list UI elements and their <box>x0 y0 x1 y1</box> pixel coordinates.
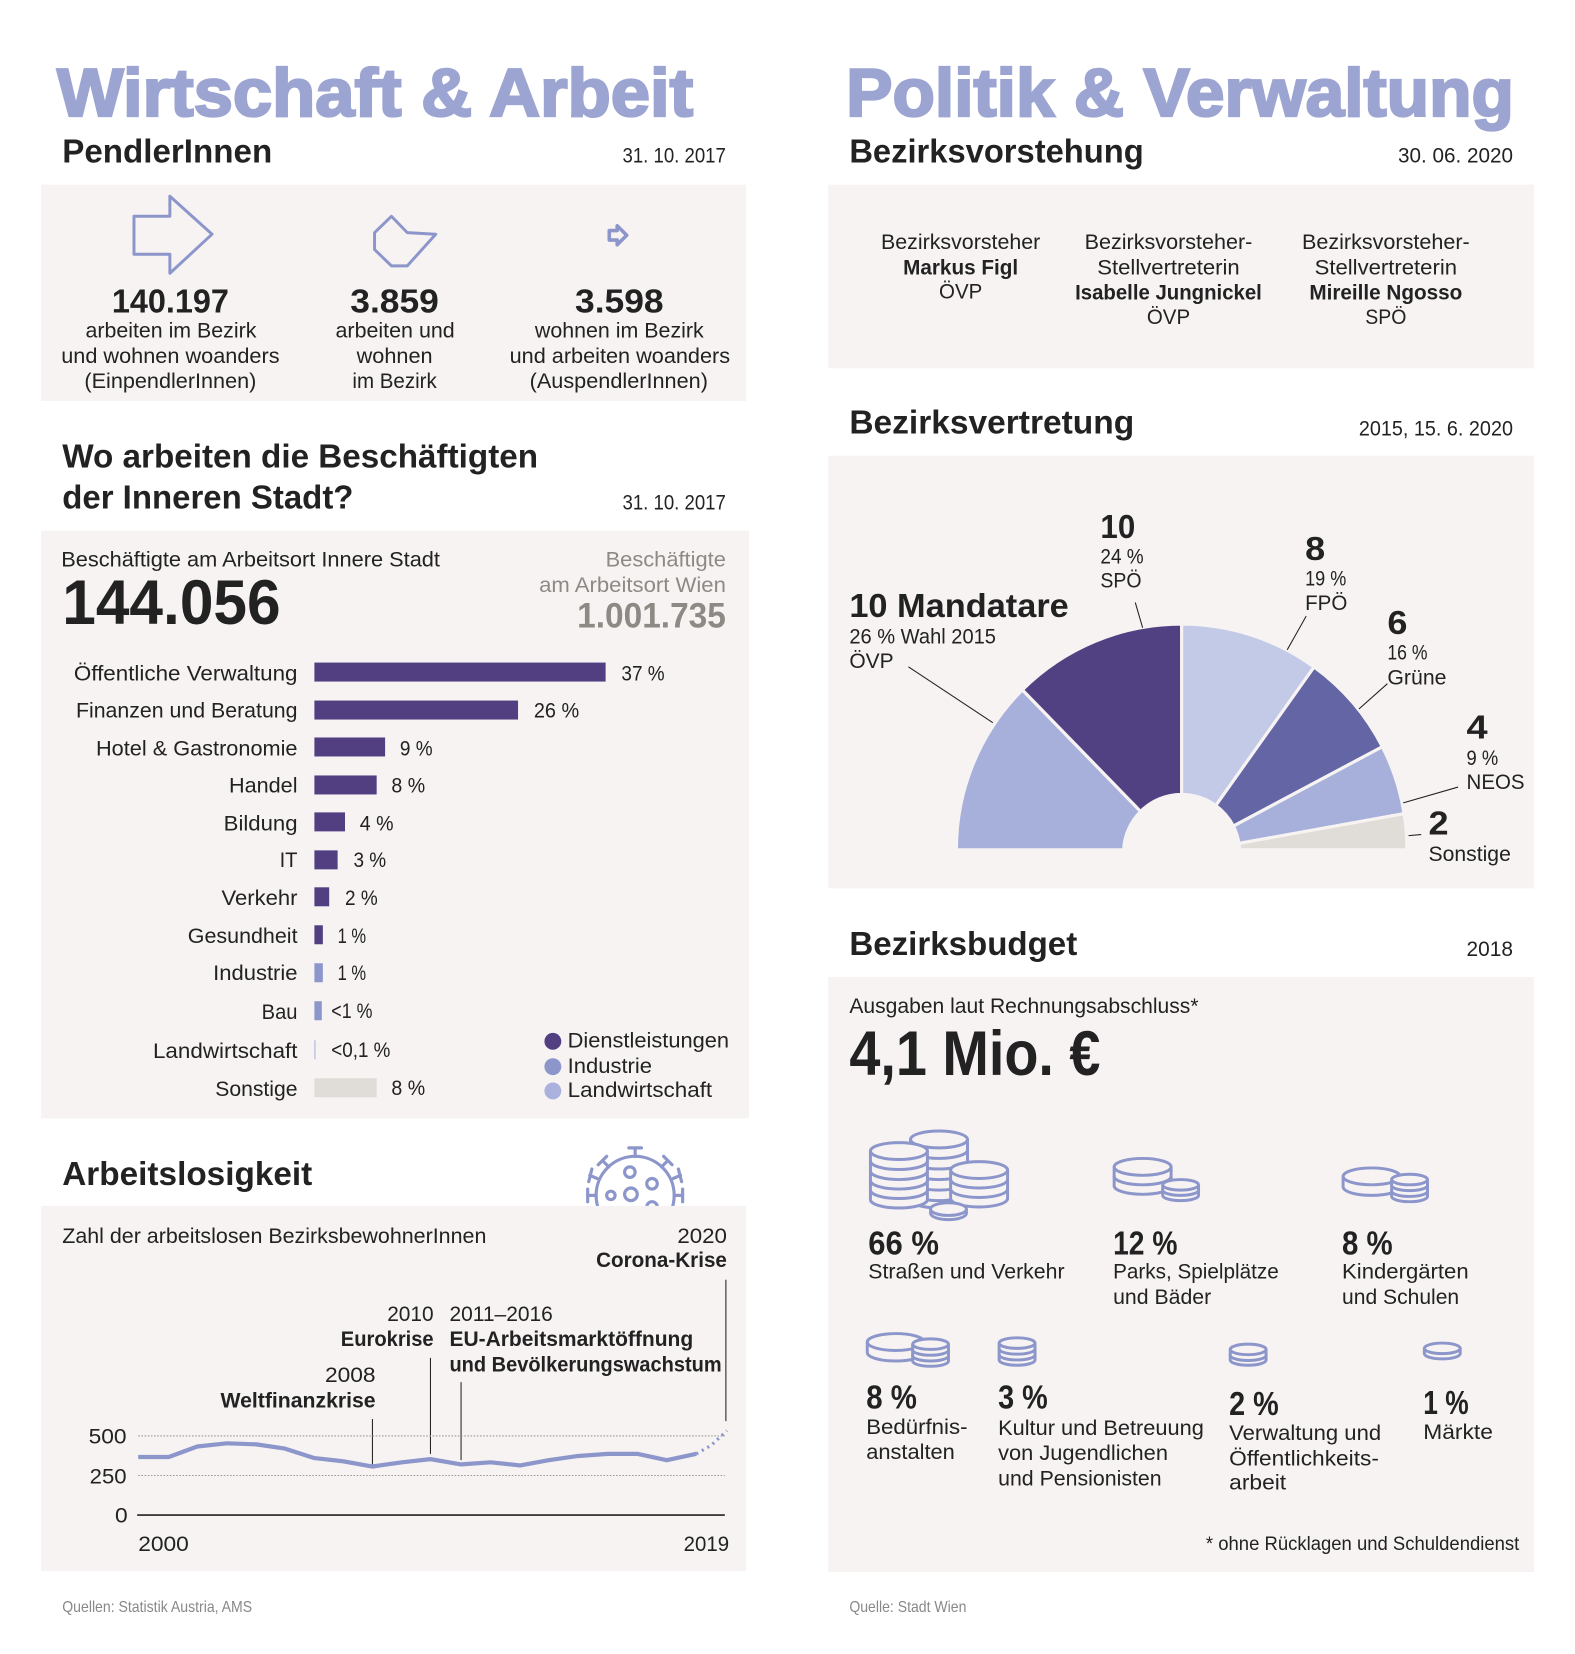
line chart: arbeitslose BezirksbewohnerInnen: 0 <box>115 1504 128 1527</box>
bar chart: Beschäftigte nach Branche: Landwirtschaft <box>153 1040 298 1063</box>
bar chart: Beschäftigte nach Branche: Hotel & Gastronomie <box>96 737 298 760</box>
item: Verwaltung und Öffentlichkeitsarbeit: Verwaltung und <box>1229 1422 1381 1445</box>
annotation: 2010 Eurokrise <box>341 1303 434 1454</box>
icon: coins 8 % Bedürfnisanstalten <box>867 1334 949 1366</box>
label: Grüne: Grüne <box>1387 667 1446 690</box>
annotation: 2020 Corona-Krise: Corona-Krise <box>596 1249 727 1272</box>
bar chart: Beschäftigte nach Branche: Bildung <box>224 812 298 835</box>
item: Kindergärten und Schulen <box>1342 1224 1469 1309</box>
person: Mireille Ngosso: Stellvertreterin <box>1315 256 1457 279</box>
line chart: arbeitslose BezirksbewohnerInnen: 2000 <box>138 1533 189 1556</box>
headline figure: Ausgaben: Ausgaben laut Rechnungsabschluss* <box>849 995 1199 1018</box>
icon: large arrow for commuters in <box>134 196 212 273</box>
bar chart: Beschäftigte nach Branche: Bau <box>262 1001 298 1024</box>
label: NEOS: 9 % <box>1467 747 1498 770</box>
panel: Arbeitslosigkeit <box>41 1206 746 1571</box>
icon: coins 8 % Kindergärten <box>1343 1168 1428 1202</box>
panel: Bezirksvertretung <box>828 456 1534 888</box>
bar chart: Beschäftigte nach Branche: 1 % <box>338 925 366 948</box>
legend: Industrie <box>568 1055 652 1078</box>
section heading: Bezirksvertretung: Bezirksvertretung <box>849 404 1134 442</box>
item: Parks, Spielplätze und Bäder: 12 % <box>1113 1224 1177 1262</box>
headline figure: Innere Stadt: 144.056 <box>62 568 281 638</box>
bar chart: Beschäftigte nach Branche: 9 % <box>400 737 433 760</box>
item: Parks, Spielplätze und Bäder <box>1113 1224 1279 1309</box>
footnote: * ohne Rücklagen und Schuldendienst <box>1206 1534 1520 1555</box>
person: Isabelle Jungnickel <box>1075 231 1262 329</box>
stat: Einpendler: und wohnen woanders <box>61 345 280 368</box>
legend: Dienstleistungen <box>568 1030 729 1053</box>
stat: wohnen und arbeiten im Bezirk: im Bezirk <box>352 370 437 393</box>
label: NEOS: 4 <box>1467 709 1488 747</box>
bar chart: Beschäftigte nach Branche: Öffentliche Verwaltung <box>74 663 298 686</box>
item: Bedürfnisanstalten: Bedürfnis- <box>866 1416 967 1439</box>
item: Bedürfnisanstalten: anstalten <box>866 1441 955 1464</box>
chart subtitle: Zahl der arbeitslosen BezirksbewohnerInnen <box>62 1225 486 1248</box>
stat: Einpendler: 140.197 <box>112 282 229 320</box>
panel: Bezirksbudget <box>828 977 1534 1572</box>
annotation: 2008 Weltfinanzkrise <box>221 1364 376 1465</box>
label: Grüne: 6 <box>1387 604 1407 642</box>
person: Mireille Ngosso: SPÖ <box>1365 306 1406 329</box>
stat: wohnen und arbeiten im Bezirk: arbeiten und <box>336 320 455 343</box>
section heading: PendlerInnen <box>62 132 726 170</box>
comparison figure: Wien: am Arbeitsort Wien <box>539 574 726 597</box>
bar chart: Beschäftigte nach Branche <box>74 663 665 1101</box>
icon: coins 3 % <box>999 1338 1035 1365</box>
label: Sonstige: Sonstige <box>1429 843 1511 866</box>
label: Grüne: 16 % <box>1387 641 1428 664</box>
line chart: arbeitslose BezirksbewohnerInnen: 500 <box>89 1425 127 1448</box>
section heading: Bezirksvertretung: 2015, 15. 6. 2020 <box>1359 418 1513 441</box>
stat: Auspendler <box>510 282 730 393</box>
bar chart: Beschäftigte nach Branche: <0,1 % <box>331 1039 390 1062</box>
comparison figure: Wien <box>539 549 726 636</box>
item: Verwaltung und Öffentlichkeitsarbeit: 2 % <box>1229 1385 1279 1423</box>
icon: shape for living and working in the district <box>375 216 436 266</box>
bar chart: Beschäftigte nach Branche: Verkehr <box>222 887 298 910</box>
headline figure: Ausgaben <box>849 995 1199 1089</box>
source: right column: Quelle: Stadt Wien <box>849 1599 966 1616</box>
bar chart: Beschäftigte nach Branche: Handel <box>229 774 298 797</box>
label: NEOS <box>1403 709 1525 803</box>
item: Kultur und Betreuung: Kultur und Betreuung <box>998 1417 1204 1440</box>
item: Kultur und Betreuung: von Jugendlichen <box>998 1442 1168 1465</box>
bar chart: Beschäftigte nach Branche: Gesundheit <box>188 925 298 948</box>
label: SPÖ: SPÖ <box>1100 570 1142 593</box>
annotation: 2011–2016 EU-Arbeitsmarktöffnung: 2011–2016 <box>449 1303 553 1326</box>
item: Parks, Spielplätze und Bäder: Parks, Spielplätze <box>1113 1261 1279 1284</box>
section heading: PendlerInnen: 31. 10. 2017 <box>622 144 726 167</box>
bar chart: Beschäftigte nach Branche: 2 % <box>345 887 378 910</box>
person: Markus Figl <box>881 231 1040 304</box>
title: Wirtschaft & Arbeit: Wirtschaft & Arbeit <box>57 56 693 131</box>
bar chart: Beschäftigte nach Branche: 8 % <box>391 774 425 797</box>
label: SPÖ: 24 % <box>1100 545 1144 568</box>
stat: wohnen und arbeiten im Bezirk: wohnen <box>356 345 433 368</box>
annotation: 2020 Corona-Krise: 2020 <box>677 1225 727 1248</box>
item: Straßen und Verkehr <box>868 1224 1065 1284</box>
label: FPÖ: FPÖ <box>1305 592 1347 615</box>
item: Straßen und Verkehr: 66 % <box>868 1224 939 1262</box>
section heading: Bezirksbudget: Bezirksbudget <box>849 925 1077 963</box>
bar chart: Beschäftigte nach Branche: 8 % <box>391 1077 425 1100</box>
label: ÖVP: 26 % Wahl 2015 <box>849 626 996 649</box>
stat: Einpendler: arbeiten im Bezirk <box>85 320 257 343</box>
section heading: Bezirksvorstehung <box>849 132 1513 170</box>
item: Bedürfnisanstalten: 8 % <box>866 1378 917 1416</box>
stat: wohnen und arbeiten im Bezirk <box>336 282 455 393</box>
section heading: Wo arbeiten die Beschäftigten <box>62 437 726 517</box>
person: Mireille Ngosso: Bezirksvorsteher- <box>1302 231 1470 254</box>
bar chart: Beschäftigte nach Branche: <1 % <box>331 1000 372 1023</box>
person: Mireille Ngosso <box>1302 231 1470 329</box>
person: Isabelle Jungnickel: Stellvertreterin <box>1097 256 1240 279</box>
annotation: 2010 Eurokrise: 2010 <box>387 1303 434 1326</box>
legend <box>544 1030 729 1102</box>
label: FPÖ <box>1287 530 1347 650</box>
icon: coin 1 % <box>1424 1343 1460 1359</box>
stat: Einpendler <box>61 282 280 393</box>
icon: coins 12 % <box>1114 1158 1199 1201</box>
label: SPÖ: 10 <box>1100 508 1135 546</box>
stat: wohnen und arbeiten im Bezirk: 3.859 <box>350 282 439 320</box>
item: Kultur und Betreuung <box>998 1378 1204 1491</box>
bar chart: Beschäftigte nach Branche: 37 % <box>621 663 665 686</box>
panel: PendlerInnen <box>41 185 746 401</box>
item: Kindergärten und Schulen: und Schulen <box>1342 1286 1459 1309</box>
label: ÖVP <box>849 587 1069 723</box>
label: SPÖ <box>1100 508 1144 628</box>
item: Kindergärten und Schulen: 8 % <box>1342 1224 1393 1262</box>
section heading: Wo arbeiten die Beschäftigten: 31. 10. 2017 <box>622 492 726 515</box>
person: Markus Figl: Markus Figl <box>903 256 1018 279</box>
annotation: 2011–2016 EU-Arbeitsmarktöffnung: und Bevölkerungswachstum <box>449 1354 722 1377</box>
headline figure: Innere Stadt: Beschäftigte am Arbeitsort Innere Stadt <box>61 549 440 572</box>
person: Isabelle Jungnickel: Bezirksvorsteher- <box>1085 231 1252 254</box>
stat: Auspendler: 3.598 <box>575 282 664 320</box>
bar chart: Beschäftigte nach Branche: Sonstige <box>215 1078 298 1101</box>
item: Parks, Spielplätze und Bäder: und Bäder <box>1113 1286 1211 1309</box>
section heading: Wo arbeiten die Beschäftigten: der Inneren Stadt? <box>62 479 353 517</box>
bar chart: Beschäftigte nach Branche: 3 % <box>353 849 386 872</box>
item: Verwaltung und Öffentlichkeitsarbeit <box>1229 1385 1381 1495</box>
item: Verwaltung und Öffentlichkeitsarbeit: arbeit <box>1229 1472 1286 1495</box>
label: NEOS: NEOS <box>1467 771 1525 794</box>
section heading: Arbeitslosigkeit: Arbeitslosigkeit <box>62 1155 312 1193</box>
section heading: Bezirksvertretung <box>849 404 1513 442</box>
section heading: Bezirksvorstehung: 30. 06. 2020 <box>1398 144 1513 167</box>
item: Märkte: Märkte <box>1423 1421 1493 1444</box>
person: Markus Figl: ÖVP <box>939 281 982 304</box>
section heading: Bezirksvorstehung: Bezirksvorstehung <box>849 132 1144 170</box>
headline figure: Innere Stadt <box>61 549 440 638</box>
annotation: 2011–2016 EU-Arbeitsmarktöffnung: EU-Arbeitsmarktöffnung <box>449 1328 693 1351</box>
comparison figure: Wien: Beschäftigte <box>606 549 726 572</box>
section heading: PendlerInnen: PendlerInnen <box>62 132 272 170</box>
item: Märkte <box>1423 1384 1493 1444</box>
item: Kindergärten und Schulen: Kindergärten <box>1342 1261 1469 1284</box>
annotation: 2010 Eurokrise: Eurokrise <box>341 1328 434 1351</box>
legend: Landwirtschaft <box>568 1079 712 1102</box>
item: Kultur und Betreuung: und Pensionisten <box>998 1468 1162 1491</box>
icon: coins 66 % <box>870 1131 1008 1220</box>
panel: Beschäftigte <box>41 531 749 1118</box>
person: Markus Figl: Bezirksvorsteher <box>881 231 1040 254</box>
icon: small arrow for commuters out <box>609 226 627 245</box>
bar chart: Beschäftigte nach Branche: Finanzen und Beratung <box>76 699 298 722</box>
bar chart: Beschäftigte nach Branche: 4 % <box>360 812 394 835</box>
icon: coins 2 % <box>1230 1344 1266 1365</box>
bar chart: Beschäftigte nach Branche: 1 % <box>338 962 366 985</box>
stat: Auspendler: und arbeiten woanders <box>510 345 730 368</box>
item: Bedürfnisanstalten <box>866 1378 967 1464</box>
annotation: 2008 Weltfinanzkrise: Weltfinanzkrise <box>221 1389 376 1412</box>
bar chart: Beschäftigte nach Branche: Industrie <box>213 962 298 985</box>
bar chart: Beschäftigte nach Branche: 26 % <box>534 699 579 722</box>
person: Isabelle Jungnickel: ÖVP <box>1147 306 1190 329</box>
label: Sonstige: 2 <box>1429 805 1449 843</box>
annotation: 2011–2016 EU-Arbeitsmarktöffnung <box>449 1303 722 1460</box>
annotation: 2008 Weltfinanzkrise: 2008 <box>325 1364 376 1387</box>
item: Märkte: 1 % <box>1423 1384 1469 1422</box>
annotation: 2020 Corona-Krise <box>596 1225 727 1421</box>
section heading: Bezirksbudget: 2018 <box>1467 938 1513 961</box>
label: ÖVP: 10 Mandatare <box>849 587 1069 625</box>
icon: coronavirus <box>588 1148 683 1234</box>
section heading: Bezirksbudget <box>849 925 1513 963</box>
person: Isabelle Jungnickel: Isabelle Jungnickel <box>1075 282 1262 305</box>
label: Grüne <box>1359 604 1446 709</box>
line chart: arbeitslose BezirksbewohnerInnen: 2019 <box>684 1533 729 1556</box>
stat: Auspendler: wohnen im Bezirk <box>534 320 704 343</box>
line chart: arbeitslose BezirksbewohnerInnen <box>89 1425 729 1556</box>
label: ÖVP: ÖVP <box>849 650 894 673</box>
item: Straßen und Verkehr: Straßen und Verkehr <box>868 1261 1065 1284</box>
panel: Bezirksvorstehung <box>828 185 1534 368</box>
stat: Einpendler: (EinpendlerInnen) <box>84 370 256 393</box>
label: Sonstige <box>1409 805 1511 866</box>
label: FPÖ: 8 <box>1305 530 1325 568</box>
item: Kultur und Betreuung: 3 % <box>998 1378 1048 1416</box>
section heading: Wo arbeiten die Beschäftigten: Wo arbeiten die Beschäftigten <box>62 437 538 475</box>
comparison figure: Wien: 1.001.735 <box>577 597 726 636</box>
line chart: arbeitslose BezirksbewohnerInnen: 250 <box>90 1465 127 1488</box>
title: Politik & Verwaltung: Politik & Verwaltung <box>846 56 1514 131</box>
source: left column: Quellen: Statistik Austria, AMS <box>62 1599 252 1616</box>
bar chart: Beschäftigte nach Branche: IT <box>280 849 298 872</box>
semicircle chart: Mandate <box>956 624 1407 850</box>
label: FPÖ: 19 % <box>1305 568 1346 591</box>
person: Mireille Ngosso: Mireille Ngosso <box>1309 282 1462 305</box>
stat: Auspendler: (AuspendlerInnen) <box>530 370 708 393</box>
item: Verwaltung und Öffentlichkeitsarbeit: Öffentlichkeits- <box>1229 1447 1379 1470</box>
headline figure: Ausgaben: 4,1 Mio. € <box>849 1019 1100 1089</box>
